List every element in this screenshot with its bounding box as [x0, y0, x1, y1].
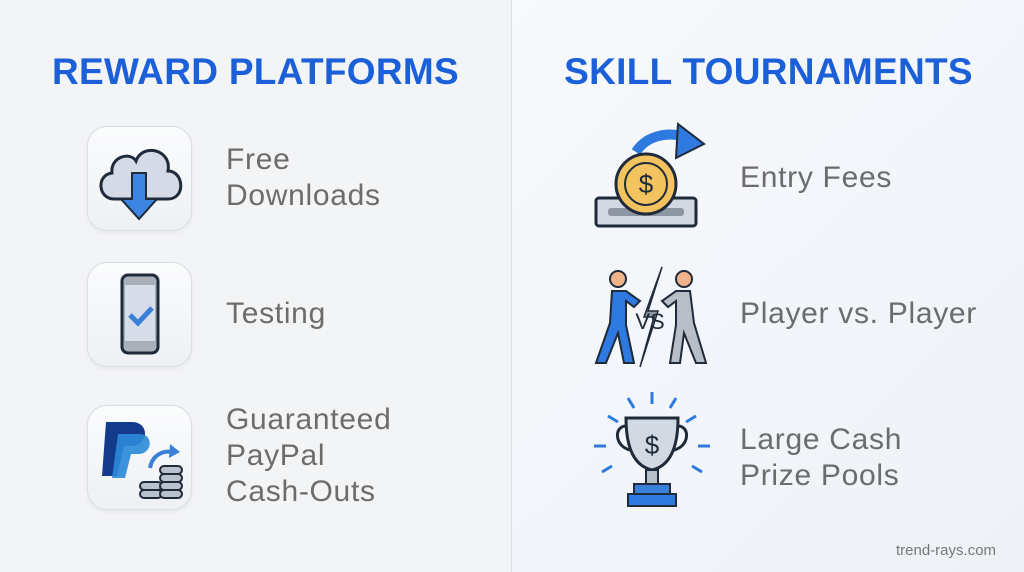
- text: large cash prize pools: [740, 423, 902, 492]
- text: testing: Testing: [226, 297, 326, 330]
- icon: cloud download: [87, 126, 192, 231]
- title: reward platforms: REWARD PLATFORMS: [52, 51, 459, 92]
- icon: paypal coins: [87, 405, 192, 510]
- icon: phone check: [87, 262, 192, 367]
- icon: player vs player: VS: [635, 309, 665, 334]
- text: guaranteed paypal cash-outs: Guaranteed: [226, 403, 391, 436]
- text: large cash prize pools: Prize Pools: [740, 459, 899, 492]
- text: entry fees: Entry Fees: [740, 161, 892, 194]
- text: free downloads: Downloads: [226, 179, 381, 212]
- icon: coin entry fee: [594, 122, 706, 228]
- text: large cash prize pools: Large Cash: [740, 423, 902, 456]
- text: guaranteed paypal cash-outs: Cash-Outs: [226, 475, 376, 508]
- title: skill tournaments: SKILL TOURNAMENTS: [564, 51, 973, 92]
- text: free downloads: Free: [226, 143, 290, 176]
- icon: player vs player: [594, 266, 708, 368]
- panel: reward platforms: [0, 0, 511, 572]
- icon: coin entry fee: $: [639, 169, 654, 199]
- icon: trophy: $: [645, 430, 660, 460]
- text: guaranteed paypal cash-outs: PayPal: [226, 439, 325, 472]
- icon: trophy: [594, 392, 710, 507]
- text: guaranteed paypal cash-outs: [226, 403, 391, 508]
- text: player vs. player: Player vs. Player: [740, 297, 977, 330]
- panel: skill tournaments: [511, 0, 1024, 572]
- text: free downloads: [226, 143, 381, 212]
- watermark: trend-rays.com: [896, 542, 996, 559]
